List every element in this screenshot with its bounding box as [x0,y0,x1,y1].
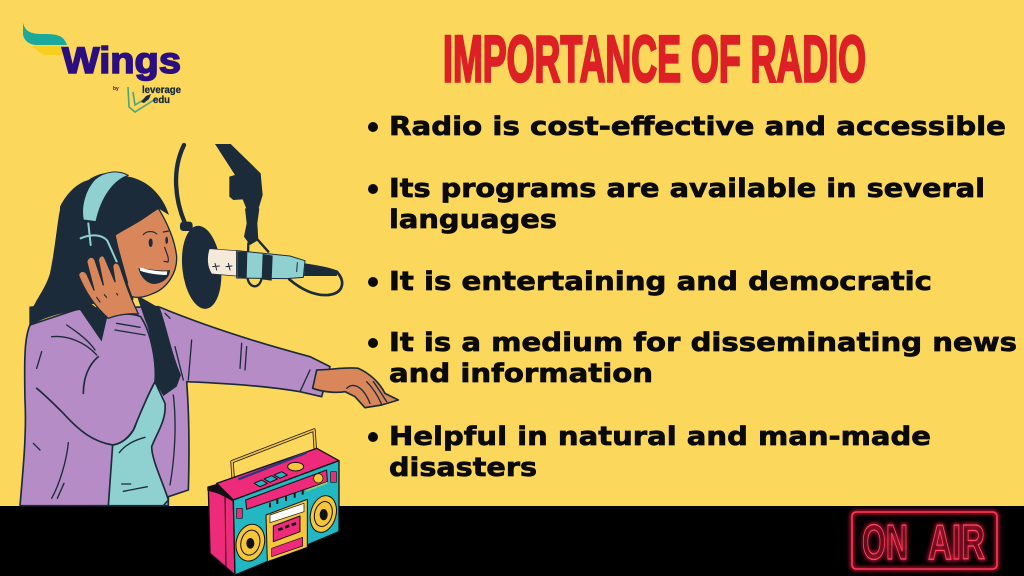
bullet list [368,112,1017,483]
icon: teal wing [23,23,67,45]
cassette deck [266,499,307,562]
foreground sleeve [37,314,155,445]
left speaker [232,521,269,564]
bullet: news [368,328,1017,389]
side rib line [223,495,227,567]
cassette tape [273,516,300,542]
headphone arm [81,223,117,262]
bullet: disasters [368,422,931,483]
handle inner [232,430,316,491]
boom arm [215,144,263,209]
pop filter [178,224,225,311]
presenter body [20,300,330,506]
front face [233,461,339,575]
jacket fold lines [33,313,310,498]
face [115,208,177,297]
suspension lines [247,237,268,286]
icon: leverage V mark [128,87,157,112]
logo: Wings by leverage edu [23,23,181,112]
teeth [140,267,167,275]
bullet: disasters: disasters [389,453,537,483]
bullet: entertaining: It is entertaining and democratic [389,267,932,297]
bullet: languages [368,174,985,235]
neon glow: AIR [928,516,985,570]
neon glow [852,512,997,570]
dial marks [270,490,303,507]
brows and nose [143,231,169,262]
top slider [238,453,307,479]
bullet: languages: languages [389,205,557,235]
logo wordmark: Wings [62,40,181,81]
dial [288,462,304,471]
bullet: disasters: Helpful in natural and man-made [389,422,931,452]
bullet: news: It is a medium for disseminating news [389,328,1017,358]
mic white body [208,249,237,276]
icon: yellow wing [33,46,64,55]
outstretched hand [313,368,398,408]
mic stand cable [176,145,185,223]
green bar [306,483,327,491]
hair top [60,173,169,300]
bullet: news: and information [389,359,653,389]
headband [83,172,128,222]
left side panel [208,488,235,575]
mic suspension [244,208,259,245]
left switch [237,508,242,518]
top panel [217,448,339,500]
buttons [254,472,287,487]
neon word: ON: ON [862,516,908,570]
mouth [138,268,170,284]
logo by: by [113,86,119,92]
sleeve outline [37,314,155,445]
right eye [165,237,168,244]
jacket and outstretched sleeve [20,307,330,506]
icon: rocket [141,94,151,103]
bullet: languages: Its programs are available in several [389,174,985,204]
handle [232,430,316,491]
neon word: AIR: AIR [928,516,985,570]
bullet: cost-effective: Radio is cost-effective and accessible [389,112,1006,142]
on air neon sign [852,512,997,570]
knuckle marks [97,293,118,302]
tape reels [278,523,296,530]
cassette keys [272,537,303,557]
mic tail [304,263,338,276]
illustration: radio presenter with microphone [20,144,398,506]
boombox [207,430,340,575]
ribbed edge [207,483,235,503]
bottom black band [0,506,1024,576]
hand on ear [78,256,138,318]
right speaker [306,493,340,535]
tuner knob [314,474,323,483]
hair back [30,173,133,313]
mic cap marks [213,263,232,270]
mic dark bands [237,252,273,281]
mic teal body [237,251,305,279]
cassette window [270,503,304,523]
neon glow: ON [862,516,908,570]
head [60,172,177,318]
finger lines [347,382,387,404]
logo leverage: leverage [142,85,181,96]
hair strand [137,295,181,396]
tuner band [246,470,327,509]
side switch [331,472,336,482]
mic detail line [295,263,299,272]
neon frame [852,512,997,569]
logo edu: edu [153,95,170,106]
shirt [108,382,168,506]
pop filter joint [180,222,193,231]
mic cable loop [289,272,342,295]
hair behind sleeve [29,300,107,342]
left eye [149,238,153,247]
